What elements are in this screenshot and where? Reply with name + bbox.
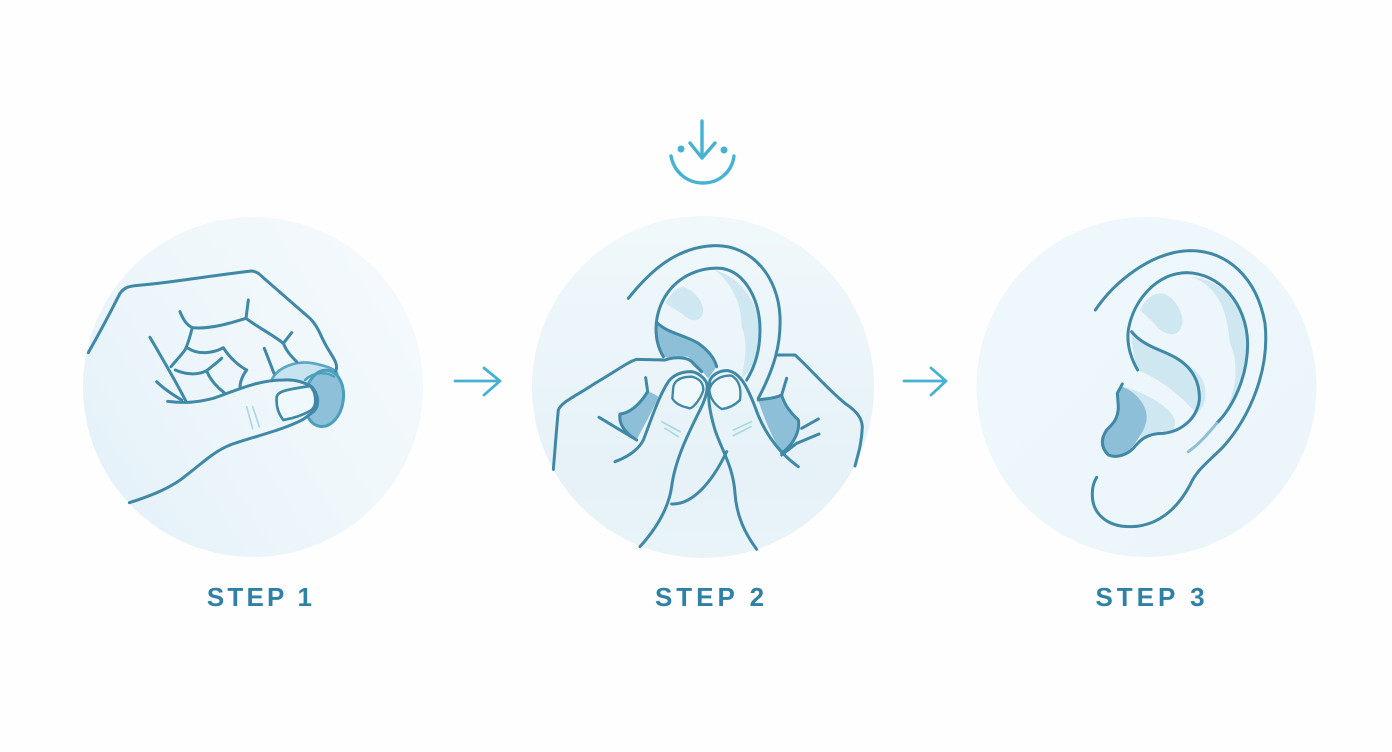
arrow: step 2 to step 3 — [904, 368, 946, 395]
panel: step 2 — [532, 216, 874, 558]
thumbnail — [277, 386, 315, 420]
inner ear outline — [1128, 273, 1248, 423]
label: step 3: STEP 3 — [1095, 582, 1209, 612]
earplug inserted — [1102, 387, 1147, 456]
illustration: earplug in ear — [1092, 251, 1266, 527]
thumb wrinkles — [247, 407, 259, 429]
ear outline — [628, 246, 780, 398]
earplug — [272, 363, 347, 429]
label: step 2: STEP 2 — [655, 582, 768, 612]
thumb wrinkles — [662, 422, 752, 437]
icon: insert downward — [671, 121, 734, 183]
panel: step 1 — [83, 217, 423, 557]
hand outline — [88, 271, 337, 371]
right hand — [778, 355, 862, 466]
lower fold — [1188, 423, 1217, 452]
step 3 background circle — [976, 217, 1316, 557]
label: step 1: STEP 1 — [207, 582, 315, 612]
illustration: hands pulling ear — [553, 246, 862, 549]
panel: step 3 — [976, 217, 1316, 557]
ear lobe and helix outline — [1092, 251, 1266, 527]
illustration: fingers holding earplug — [88, 271, 347, 503]
concha and plug outline — [1102, 332, 1199, 456]
ear shading — [1123, 277, 1248, 452]
step 2 background circle — [532, 216, 874, 558]
shaded palms — [620, 392, 799, 453]
ear shading — [656, 270, 760, 378]
thumb — [168, 380, 318, 412]
thumb tip fill — [270, 380, 318, 427]
left hand — [553, 358, 702, 469]
step 1 background circle — [83, 217, 423, 557]
arrow: step 1 to step 2 — [455, 368, 500, 395]
finger creases — [150, 300, 297, 401]
